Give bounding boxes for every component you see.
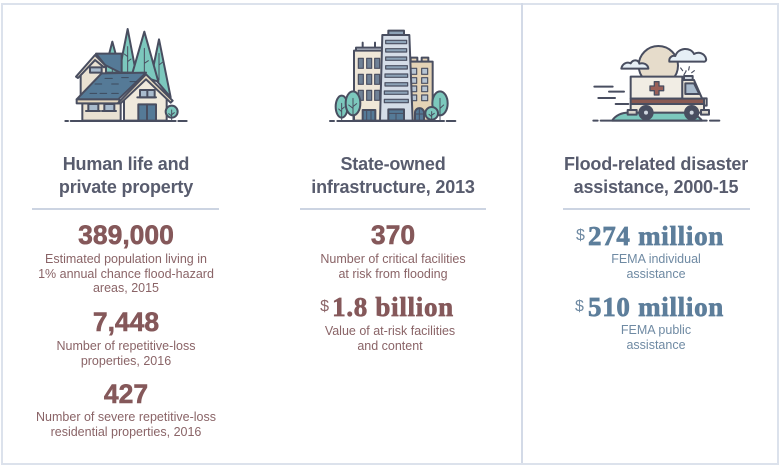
text: value of facilities: and content bbox=[357, 338, 423, 352]
heading: disaster assistance: assistance, 2000-15 bbox=[574, 177, 738, 197]
text: critical facilities: at risk from flooding bbox=[338, 266, 448, 280]
text: repetitive-loss: Number of repetitive-loss bbox=[57, 339, 195, 353]
text: population: 1% annual chance flood-hazard bbox=[38, 266, 214, 280]
text: value of facilities bbox=[325, 324, 455, 352]
heading: disaster assistance: Flood-related disaster bbox=[564, 154, 748, 174]
icon: house and trees bbox=[64, 28, 188, 122]
text: individual assistance: assistance bbox=[626, 266, 686, 280]
stat: 274 million: 274 million bbox=[588, 221, 724, 251]
icon: ambulance bbox=[592, 45, 720, 122]
text: public assistance: FEMA public bbox=[621, 323, 691, 337]
column divider bbox=[521, 3, 523, 463]
divider bbox=[300, 208, 486, 210]
stat: 7,448: 7,448 bbox=[93, 307, 159, 337]
text: critical facilities: Number of critical facilities bbox=[320, 252, 466, 266]
heading: infrastructure: State-owned bbox=[340, 154, 446, 174]
text: $ bbox=[575, 298, 584, 315]
stat: 389,000: 389,000 bbox=[78, 220, 174, 250]
text: severe repetitive-loss: residential properties, 2016 bbox=[51, 424, 201, 438]
stat: 370: 370 bbox=[371, 220, 415, 250]
text: $ bbox=[576, 227, 585, 244]
text: population bbox=[38, 252, 214, 295]
text: population: Estimated population living in bbox=[45, 252, 207, 266]
heading: infrastructure bbox=[311, 154, 475, 197]
text: individual assistance: FEMA individual bbox=[611, 252, 701, 266]
text: population: areas, 2015 bbox=[93, 281, 159, 295]
stat: 427: 427 bbox=[104, 379, 148, 409]
heading: human life: private property bbox=[59, 177, 193, 197]
text: individual assistance bbox=[611, 252, 701, 280]
text: public assistance bbox=[621, 323, 691, 352]
text: severe repetitive-loss: Number of severe repetitive-loss bbox=[36, 410, 216, 424]
text: value of facilities: Value of at-risk facilities bbox=[325, 324, 455, 338]
heading: human life: Human life and bbox=[63, 154, 189, 174]
stat: 1.8 billion: 1.8 billion bbox=[332, 292, 454, 322]
text: $ bbox=[320, 298, 329, 315]
heading: disaster assistance bbox=[564, 154, 748, 197]
text: severe repetitive-loss bbox=[36, 410, 216, 438]
text: public assistance: assistance bbox=[626, 338, 686, 352]
divider bbox=[32, 208, 219, 210]
heading: infrastructure: infrastructure, 2013 bbox=[311, 177, 475, 197]
text: repetitive-loss: properties, 2016 bbox=[81, 354, 171, 368]
text: critical facilities bbox=[320, 252, 466, 280]
text: repetitive-loss bbox=[57, 339, 195, 368]
icon: buildings bbox=[329, 30, 456, 122]
divider bbox=[563, 208, 750, 210]
heading: human life bbox=[59, 154, 194, 197]
stat: 510 million: 510 million bbox=[588, 292, 724, 322]
